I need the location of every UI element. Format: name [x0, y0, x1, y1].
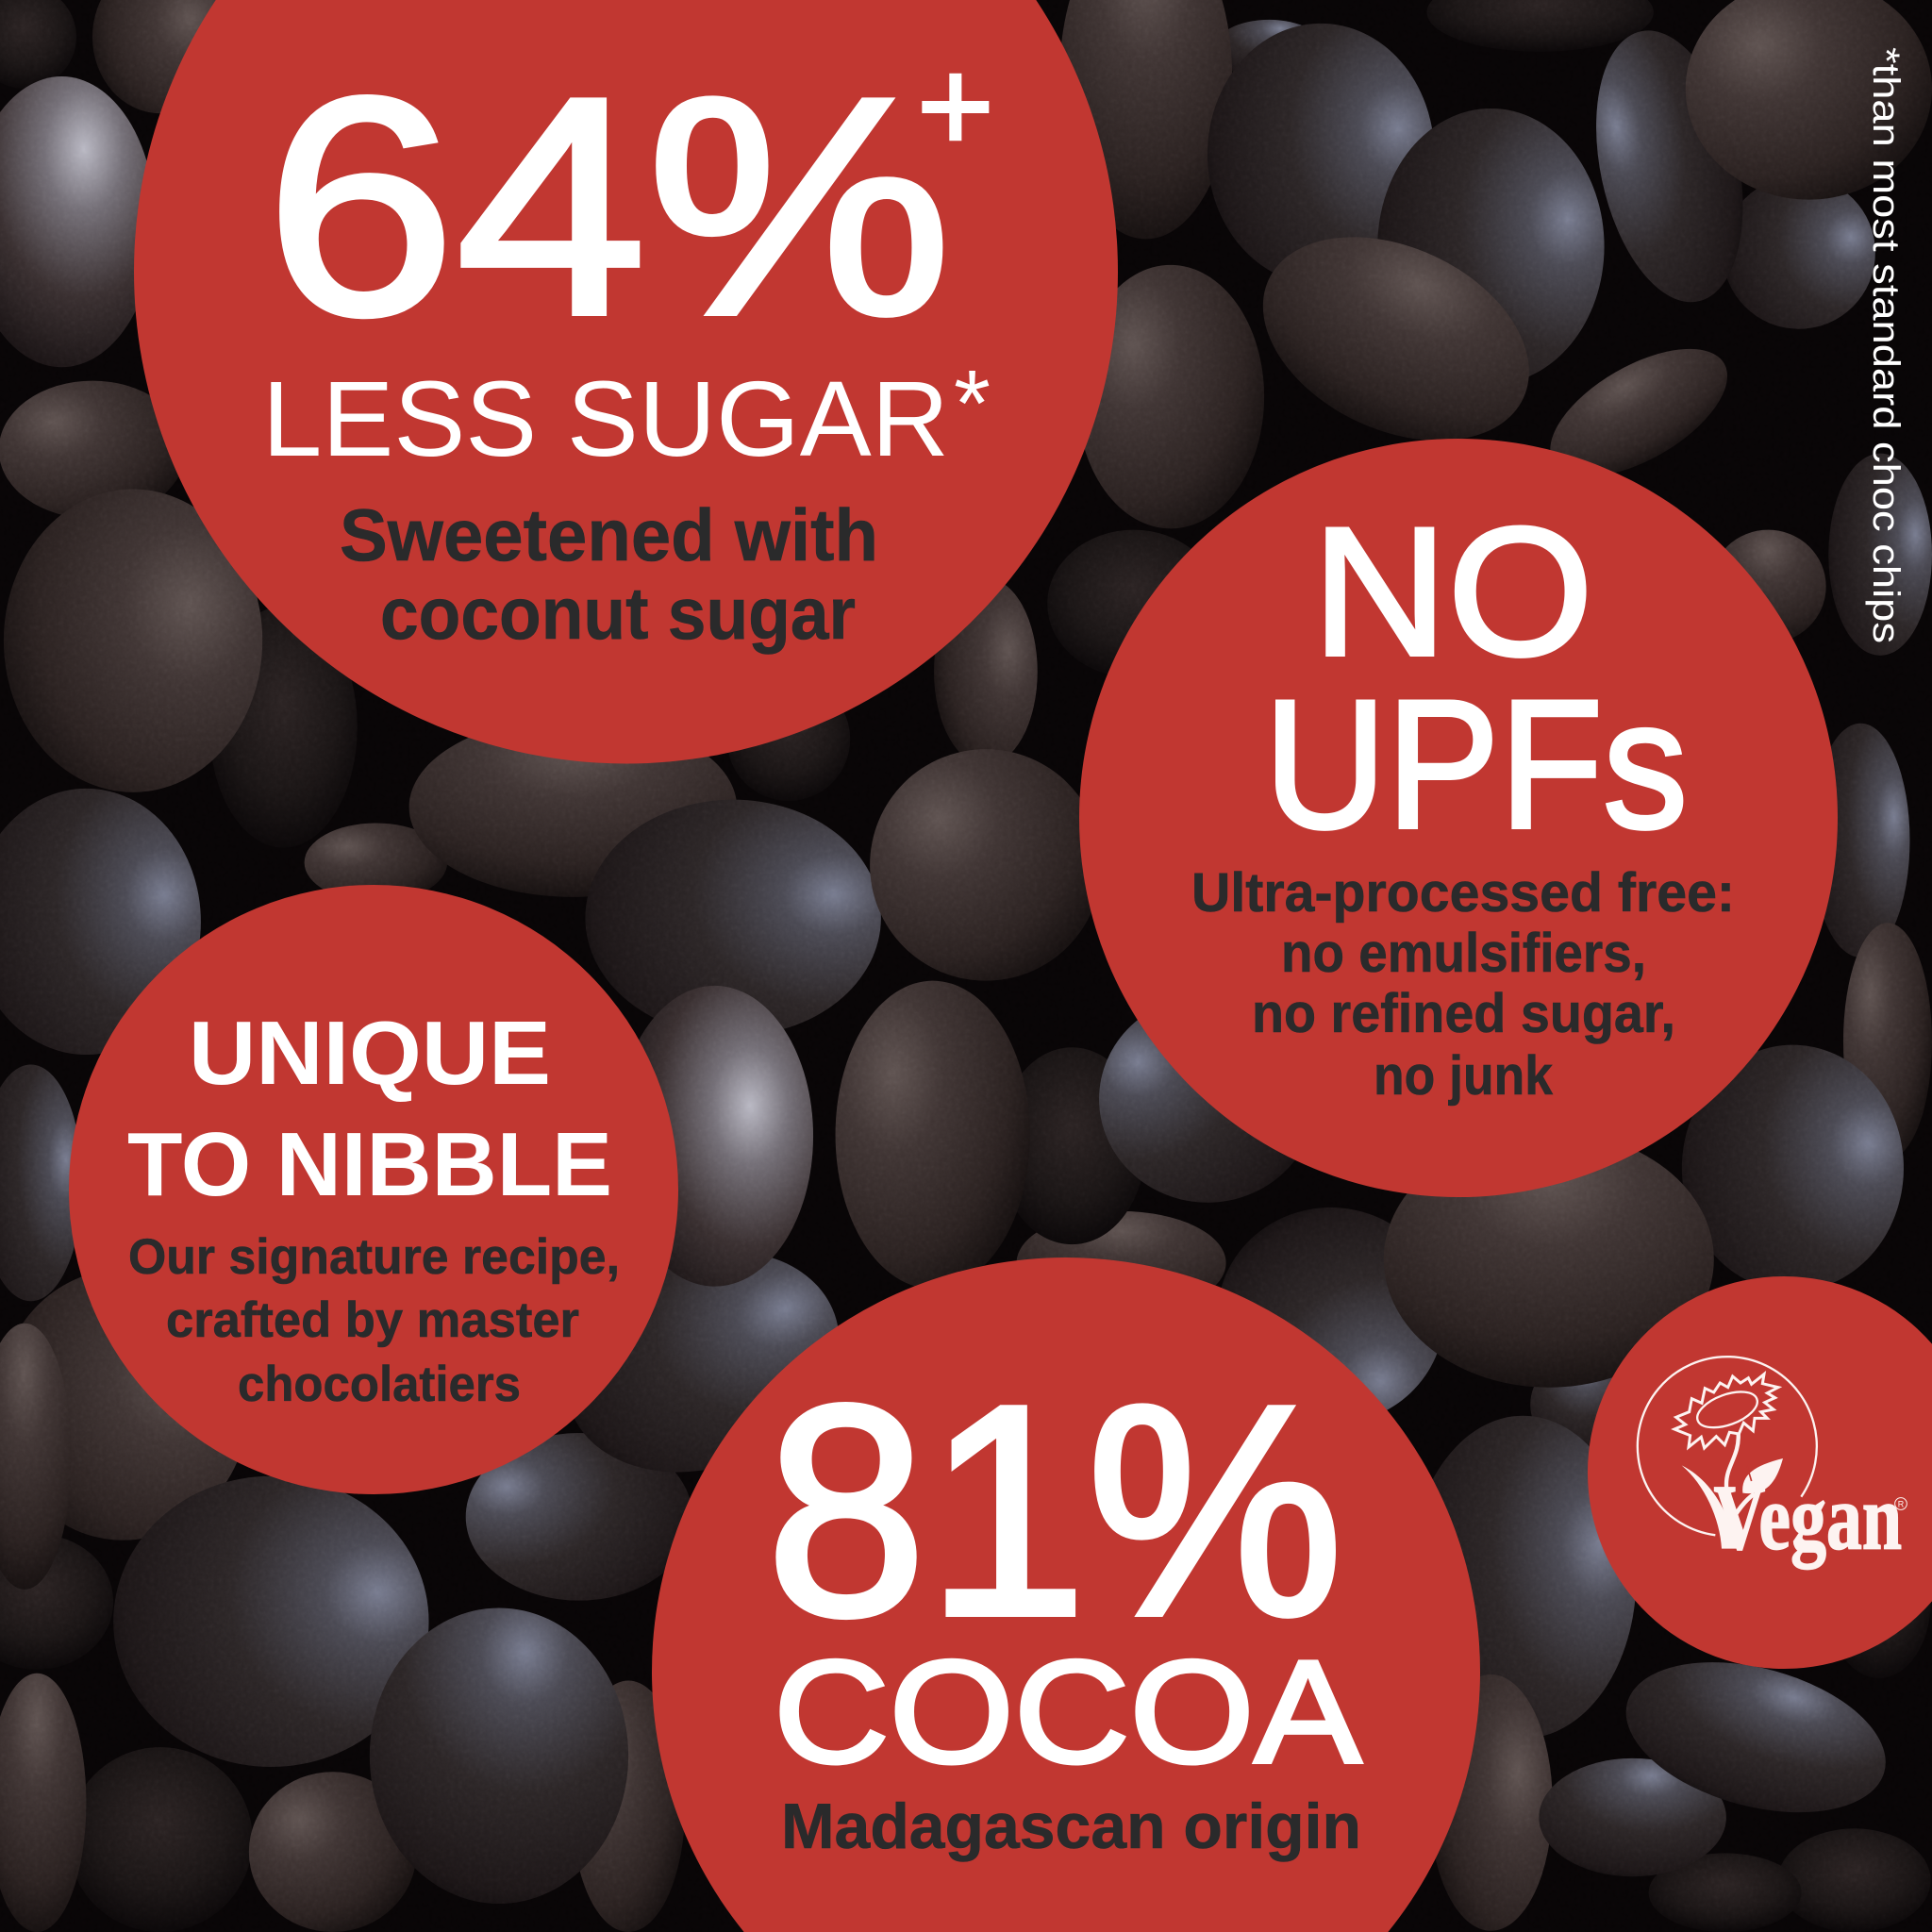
side note: footnote rotated text: *than most standard choc chips [1865, 47, 1907, 643]
heading: no UPFs [1264, 490, 1688, 867]
circle: red badge [652, 1257, 1480, 1932]
text: ultra-processed free list: no junk [1374, 1045, 1554, 1107]
asterisk: * [954, 351, 991, 457]
circle: red badge [1079, 439, 1838, 1197]
heading: cocoa: COCOA [774, 1630, 1362, 1793]
stat: 64%: 64% [265, 33, 952, 379]
heading: unique to Nibble: TO NIBBLE [127, 1114, 612, 1215]
heading: unique to Nibble: UNIQUE [189, 1003, 551, 1104]
heading: no UPFs: UPFs [1264, 662, 1688, 867]
text: Madagascan origin: Madagascan origin [781, 1790, 1361, 1862]
heading: unique to Nibble [127, 1003, 612, 1215]
text: sweetened with coconut sugar: coconut sugar [380, 572, 856, 655]
panel: 64% less sugar [134, 0, 1118, 763]
heading: less sugar: LESS SUGAR [262, 359, 949, 478]
panel: no UPFs [1079, 439, 1838, 1197]
text: ultra-processed free list: no emulsifiers, [1281, 923, 1646, 984]
text: ultra-processed free list: no refined sugar, [1252, 983, 1675, 1044]
stat: 81%: 81% [766, 1343, 1343, 1678]
text: sweetened with coconut sugar [340, 493, 878, 655]
panel: vegan badge [1588, 1276, 1932, 1669]
text: ultra-processed free list: Ultra-processed free: [1191, 862, 1735, 924]
heading: no UPFs: NO [1312, 490, 1593, 694]
icon: vegan sunflower logo: R [1898, 1499, 1905, 1508]
panel: unique to Nibble [69, 885, 678, 1494]
text: signature recipe: chocolatiers [238, 1357, 521, 1412]
plus sign: + [917, 31, 994, 179]
text: signature recipe [128, 1229, 620, 1412]
text: signature recipe: crafted by master [166, 1292, 579, 1348]
circle: red badge [69, 885, 678, 1494]
icon: vegan sunflower logo [1638, 1357, 1907, 1570]
text: ultra-processed free list [1191, 862, 1735, 1107]
panel: 81% cocoa [652, 1257, 1480, 1932]
text: sweetened with coconut sugar: Sweetened with [340, 493, 878, 576]
circle: red badge [134, 0, 1118, 763]
text: signature recipe: Our signature recipe, [128, 1229, 620, 1285]
circle: red badge [1588, 1276, 1932, 1669]
